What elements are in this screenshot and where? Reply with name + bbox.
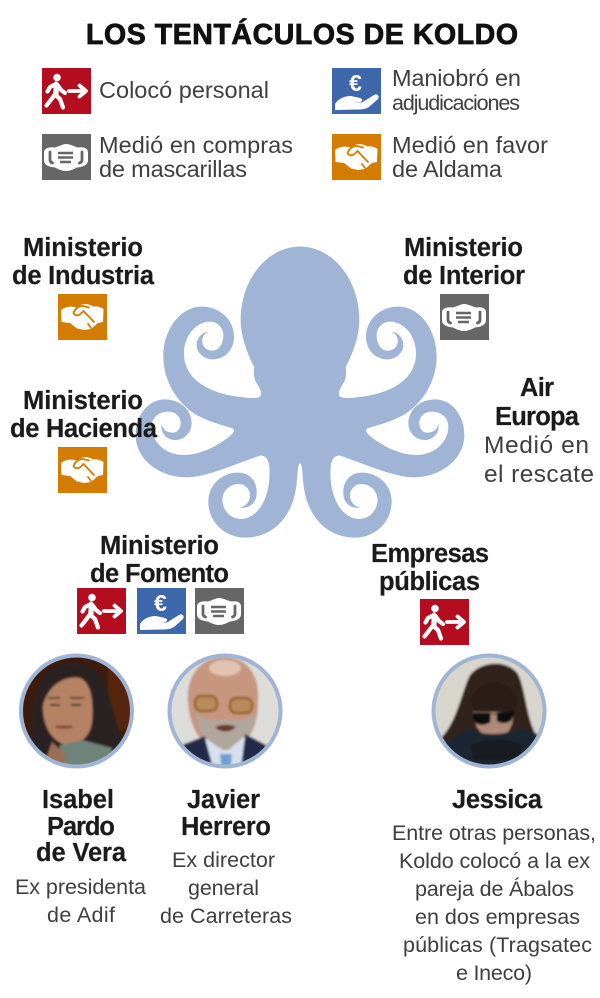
text: Jessica: en dos empresas [415,905,580,929]
legend: colocó personal [42,68,269,114]
label: Air Europa [484,374,594,488]
text: Jessica: Koldo colocó a la ex [399,849,590,873]
text: Jessica: Entre otras personas, [392,821,596,845]
legend: medió en compras de mascarillas [42,132,293,182]
text: Jessica [392,786,596,985]
label: Ministerio de Industria: Ministerio [23,234,143,262]
legend: medió en favor de Aldama: de Aldama [392,156,503,182]
photo: Isabel Pardo de Vera [19,654,134,768]
text: Javier Herrero: de Carreteras [160,904,292,928]
label: Ministerio de Interior: Ministerio [404,234,523,262]
label: Ministerio de Hacienda: de Hacienda [10,415,158,443]
text: Jessica: Jessica [452,786,543,814]
label: Ministerio de Fomento [77,532,244,634]
label: Air Europa: Medió en [484,432,589,459]
text: Isabel Pardo de Vera: de Adif [47,903,115,927]
label: Ministerio de Hacienda: Ministerio [23,387,143,415]
title: LOS TENTÁCULOS DE KOLDO [86,19,518,51]
text: Isabel Pardo de Vera: de Vera [36,839,127,867]
legend: medió en compras de mascarillas: de mascarillas [99,156,247,182]
text: Isabel Pardo de Vera [15,786,146,927]
label: Ministerio de Fomento: Ministerio [100,532,219,560]
label: Ministerio de Interior: de Interior [403,262,525,290]
legend: maniobró en adjudicaciones: Maniobró en [392,65,521,91]
text: Isabel Pardo de Vera: Pardo [47,813,115,841]
label: Ministerio de Industria [12,234,155,340]
text: Javier Herrero: Javier [187,786,260,814]
legend: medió en favor de Aldama [332,132,548,182]
octopus illustration [136,247,464,538]
text: Javier Herrero [160,786,292,928]
label: Ministerio de Fomento: de Fomento [90,560,229,588]
text: Javier Herrero: Herrero [181,813,271,841]
legend: medió en compras de mascarillas: Medió en compras [99,132,293,158]
text: Isabel Pardo de Vera: Ex presidenta [15,875,146,899]
photo: Jessica [432,654,546,768]
legend: colocó personal: Colocó personal [99,77,269,103]
legend: maniobró en adjudicaciones [332,65,521,115]
label: Air Europa: Air [520,374,554,402]
label: Ministerio de Interior [403,234,525,340]
label: Air Europa: Europa [495,403,580,431]
label: Empresas públicas: públicas [379,568,480,596]
text: Isabel Pardo de Vera: Isabel [42,786,114,814]
label: Air Europa: el rescate [484,461,594,488]
text: Javier Herrero: general [188,876,259,900]
label: Ministerio de Hacienda [10,387,158,493]
label: Empresas públicas: Empresas [371,540,489,568]
legend: medió en favor de Aldama: Medió en favor [392,132,548,158]
legend: maniobró en adjudicaciones: adjudicaciones [392,91,520,115]
photo: Javier Herrero [168,654,282,768]
text: Jessica: pareja de Ábalos [415,876,574,901]
label: Empresas públicas [371,540,489,645]
text: Javier Herrero: Ex director [172,848,275,872]
text: Jessica: e Ineco) [456,961,532,985]
text: Jessica: públicas (Tragsatec [403,933,592,957]
label: Ministerio de Industria: de Industria [12,262,155,290]
